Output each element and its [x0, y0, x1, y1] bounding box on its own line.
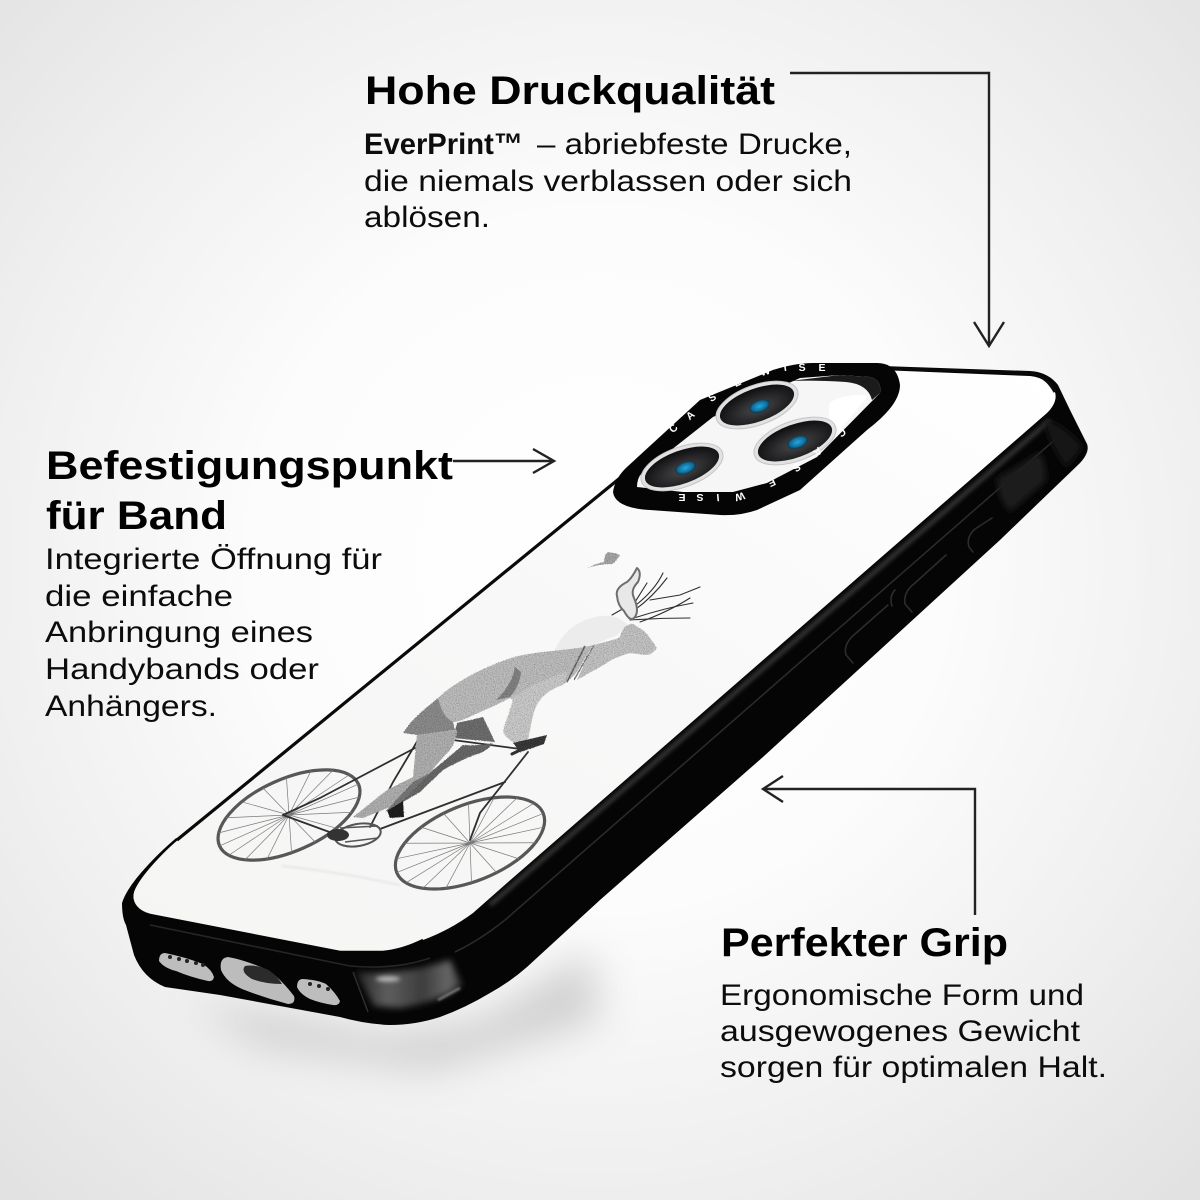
- front wheel: [383, 778, 557, 908]
- description: grip: ausgewogenes Gewicht: [720, 1015, 1081, 1048]
- neck and head: [577, 624, 657, 680]
- description: print quality: die niemals verblassen oder sich: [364, 165, 852, 198]
- phone shadow: [190, 950, 600, 1070]
- description: grip: Ergonomische Form und: [720, 979, 1084, 1012]
- case body silhouette: [122, 363, 1088, 1025]
- side buttons: [845, 518, 992, 663]
- ring lettering: E: [732, 376, 743, 390]
- speaker right: [297, 979, 340, 1005]
- heading: Befestigungspunkt für Band: [46, 444, 453, 538]
- bottom ports: [159, 953, 340, 1005]
- ring lettering: A: [684, 408, 698, 423]
- drivetrain: [327, 820, 383, 850]
- heading: Befestigungspunkt für Band: für Band: [46, 494, 227, 538]
- text block: print quality: [364, 69, 852, 234]
- text block: grip: [720, 921, 1107, 1084]
- jacket: [438, 645, 593, 722]
- description: strap attachment: [45, 543, 382, 723]
- arrow: print quality: [790, 73, 1004, 346]
- camera module: [613, 362, 900, 515]
- ring lettering: S: [706, 391, 719, 405]
- description: print quality: – abriebfeste Drucke,: [537, 128, 852, 161]
- back face: [133, 370, 1056, 952]
- speaker left: [159, 953, 214, 981]
- ground shadow line: [282, 866, 400, 885]
- camera glass: [637, 375, 880, 492]
- lens right: [748, 407, 842, 475]
- heading: Hohe Druckqualität: Hohe Druckqualität: [365, 69, 775, 113]
- dark rear triangle: [453, 717, 495, 742]
- front leg: [503, 672, 567, 743]
- description: print quality: EverPrint™: [364, 128, 523, 161]
- description: strap attachment: Integrierte Öffnung für: [45, 543, 382, 576]
- arrow: strap attachment: [453, 449, 554, 473]
- back face edge line: [177, 368, 1055, 840]
- bicycle frame: [283, 740, 541, 840]
- ring lettering: I: [716, 491, 720, 503]
- ring lettering: C: [834, 425, 848, 440]
- heading: Befestigungspunkt für Band: Befestigungspunkt: [46, 444, 453, 488]
- ring lettering: [667, 362, 848, 503]
- ring lettering: W: [733, 489, 746, 503]
- ring lettering: W: [759, 365, 772, 379]
- description: print quality: [364, 128, 852, 234]
- description: strap attachment: Handybands oder: [45, 653, 319, 686]
- shorts: [403, 698, 455, 735]
- ring lettering: S: [696, 491, 704, 503]
- side wall highlights: [150, 420, 1083, 1012]
- near rear leg: [353, 730, 457, 818]
- lens left: [635, 433, 729, 501]
- text block: strap attachment: [45, 444, 453, 723]
- flying bird: [587, 552, 620, 568]
- heading: Perfekter Grip: Perfekter Grip: [721, 921, 1008, 965]
- ring lettering: E: [678, 491, 686, 503]
- ring lettering: E: [818, 362, 826, 374]
- camera inner shade: [790, 375, 880, 400]
- ring lettering: E: [766, 475, 777, 489]
- ring lettering: S: [790, 460, 803, 474]
- rear wheel: [205, 751, 373, 879]
- ring lettering: C: [667, 421, 681, 436]
- description: strap attachment: die einfache: [45, 580, 233, 613]
- description: strap attachment: Anbringung eines: [45, 616, 313, 649]
- ring lettering: A: [810, 444, 824, 459]
- description: print quality: ablösen.: [364, 201, 490, 234]
- illustration: deer on bicycle: [205, 552, 700, 908]
- hoof on pedal: [513, 735, 547, 752]
- charging port: [221, 957, 294, 1004]
- sun disc: [553, 616, 628, 654]
- ring lettering: S: [798, 362, 806, 374]
- antlers: [612, 573, 700, 622]
- description: grip: [720, 979, 1107, 1084]
- description: strap attachment: Anhängers.: [45, 690, 217, 723]
- camera ring: [613, 363, 900, 515]
- lens top: [710, 371, 804, 439]
- ring lettering: I: [783, 362, 787, 374]
- squirrel on antlers: [617, 568, 640, 619]
- deer body with pencil shading: [353, 624, 657, 818]
- phone case: [122, 363, 1088, 1025]
- description: grip: sorgen für optimalen Halt.: [720, 1051, 1107, 1084]
- far leg: [387, 743, 493, 810]
- arrow: grip: [763, 776, 975, 915]
